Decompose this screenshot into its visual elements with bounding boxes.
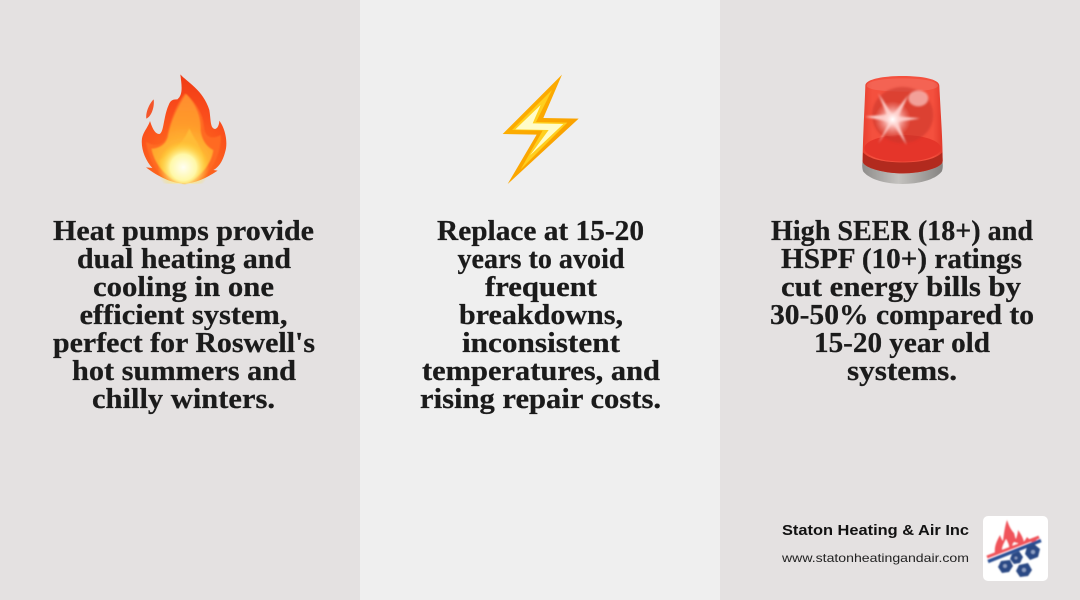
panel: replacement timing	[360, 0, 720, 600]
text: replacement copy	[420, 215, 661, 415]
text: replacement copy: breakdowns,	[459, 299, 623, 331]
text: efficiency copy: High SEER (18+) and	[771, 215, 1033, 247]
text: heat pumps copy: perfect for Roswell's	[53, 327, 315, 359]
text: heat pumps copy: dual heating and	[77, 243, 291, 275]
text: efficiency copy: systems.	[847, 355, 957, 387]
text: replacement copy: inconsistent	[462, 327, 620, 359]
text: efficiency copy: HSPF (10+) ratings	[781, 243, 1022, 275]
text: company name and website	[781, 522, 969, 565]
footer: company branding	[781, 516, 1048, 581]
text: replacement copy: temperatures, and	[422, 355, 660, 387]
icon: company logo	[983, 516, 1048, 581]
text: heat pumps copy: chilly winters.	[92, 383, 275, 415]
text: efficiency copy: 15-20 year old	[814, 327, 990, 359]
icon: red siren	[862, 76, 943, 184]
text: replacement copy: Replace at 15-20	[437, 215, 644, 247]
text: efficiency copy: cut energy bills by	[781, 271, 1022, 303]
text: heat pumps copy: Heat pumps provide	[53, 215, 314, 247]
text: replacement copy: rising repair costs.	[420, 383, 661, 415]
text: company name and website: www.statonheatingandair.com	[781, 551, 969, 565]
text: heat pumps copy: hot summers and	[72, 355, 296, 387]
panel: efficiency ratings	[720, 0, 1080, 600]
icon: fire	[142, 74, 226, 185]
panel: heat pumps	[0, 0, 360, 600]
text: replacement copy: frequent	[485, 271, 597, 303]
text: efficiency copy: 30-50% compared to	[770, 299, 1034, 331]
text: company name and website: Staton Heating & Air Inc	[782, 522, 969, 539]
text: replacement copy: years to avoid	[458, 243, 624, 275]
text: heat pumps copy	[53, 215, 315, 415]
icon: lightning bolt	[502, 74, 579, 184]
text: efficiency copy	[770, 215, 1034, 387]
text: heat pumps copy: cooling in one	[93, 271, 274, 303]
text: heat pumps copy: efficient system,	[80, 299, 288, 331]
